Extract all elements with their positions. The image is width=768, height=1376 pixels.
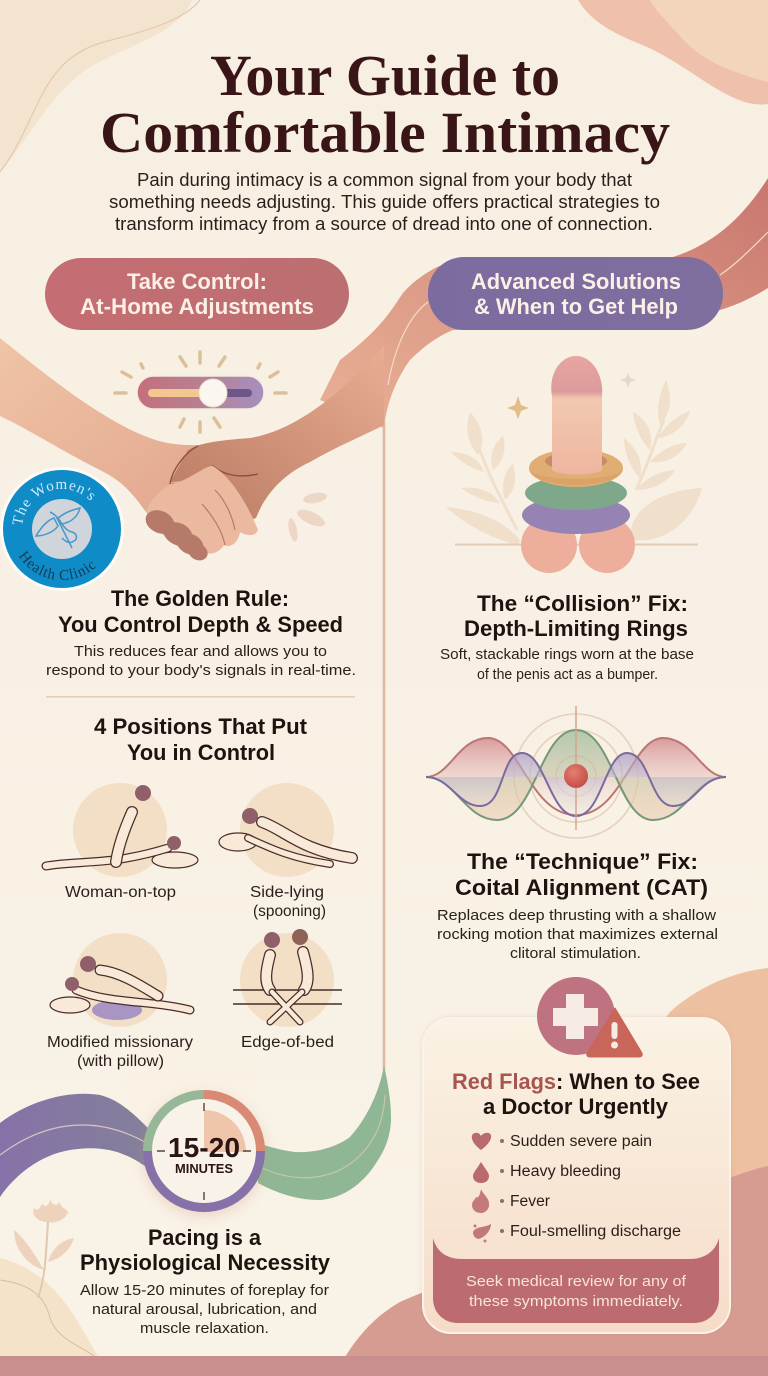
pacing text: muscle relaxation. [140, 1320, 269, 1337]
list: heavy bleeding [473, 1162, 621, 1183]
icon: control slider [115, 352, 286, 432]
position: edge-of-bed: Edge-of-bed [241, 1034, 334, 1051]
technique fix text: Replaces deep thrusting with a shallow [437, 907, 716, 924]
icon: sparkles [507, 373, 636, 419]
list: sudden severe pain: Sudden severe pain [510, 1133, 652, 1150]
icon: caduceus [36, 508, 80, 548]
position: edge-of-bed [233, 929, 342, 1051]
title [100, 43, 670, 165]
golden rule text: respond to your body's signals in real-time. [46, 662, 356, 679]
positions heading: You in Control [127, 740, 275, 765]
position: modified missionary: Modified missionary [47, 1034, 193, 1051]
seek review text: these symptoms immediately. [469, 1293, 683, 1310]
collision fix text: Depth-Limiting Rings [464, 616, 688, 641]
pacing text: Allow 15-20 minutes of foreplay for [80, 1282, 329, 1299]
technique fix text: The “Technique” Fix: [467, 849, 698, 874]
heading pill: take control: Take Control: [127, 269, 267, 294]
collision fix text: Soft, stackable rings worn at the base [440, 646, 694, 663]
pacing text: Pacing is a [148, 1225, 262, 1250]
title: Comfortable Intimacy [100, 100, 670, 165]
green ring [525, 476, 627, 510]
heading pill: take control [45, 258, 349, 330]
collision fix text: The “Collision” Fix: [477, 591, 688, 616]
list: fever: Fever [510, 1193, 550, 1210]
golden rule text [46, 586, 356, 679]
leaf sprigs [446, 380, 702, 545]
title: Your Guide to [210, 43, 560, 108]
red flags heading: Red Flags: When to See [452, 1069, 700, 1094]
list: heavy bleeding: Heavy bleeding [510, 1163, 621, 1180]
golden rule text: This reduces fear and allows you to [74, 643, 327, 660]
pacing text [80, 1225, 331, 1337]
red flags heading: a Doctor Urgently [483, 1094, 669, 1119]
handshake illustration [0, 338, 384, 563]
seek review text: Seek medical review for any of [466, 1273, 687, 1290]
pacing text: natural arousal, lubrication, and [92, 1301, 317, 1318]
pacing text: Physiological Necessity [80, 1250, 331, 1275]
clock: 15-20 minutes: MINUTES [175, 1161, 233, 1176]
logo: the women's health clinic: Health Clinic [18, 550, 96, 580]
clock: 15-20 minutes [143, 1090, 265, 1216]
list: foul-smelling discharge [473, 1223, 681, 1242]
logo: the women's health clinic: The Women's [12, 482, 94, 524]
technique fix text: Coital Alignment (CAT) [455, 875, 708, 900]
depth-limiting rings illustration [446, 356, 702, 573]
intro text [109, 170, 660, 234]
purple and green ribbon [0, 1065, 391, 1200]
golden rule text: The Golden Rule: [111, 586, 289, 611]
intro text: transform intimacy from a source of dread into one of connection. [115, 214, 653, 234]
icon: medical cross with warning [537, 977, 642, 1057]
collision fix text [440, 591, 694, 683]
positions heading: 4 Positions That Put [94, 714, 308, 739]
heading pill: advanced solutions: Advanced Solutions [471, 269, 681, 294]
position: modified missionary [47, 933, 193, 1070]
intro text: something needs adjusting. This guide offers practical strategies to [109, 192, 660, 212]
flowing ribbon and centre line [320, 178, 768, 1070]
position: woman-on-top: Woman-on-top [65, 884, 176, 901]
intro text: Pain during intimacy is a common signal from your body that [137, 170, 632, 190]
flower decoration [14, 1200, 74, 1298]
logo: the women's health clinic [0, 467, 124, 591]
position: side-lying: (spooning) [253, 903, 326, 920]
heading pill: take control: At-Home Adjustments [80, 294, 314, 319]
technique fix text [437, 849, 718, 962]
bottom band [0, 1356, 768, 1376]
positions heading [94, 714, 308, 765]
heading pill: advanced solutions: & When to Get Help [474, 294, 678, 319]
heading pill: advanced solutions [428, 257, 723, 330]
yellow ring [529, 449, 623, 487]
purple ring [522, 496, 630, 534]
position: side-lying: Side-lying [250, 884, 324, 901]
red flags heading [452, 1069, 700, 1119]
seek review text [466, 1273, 687, 1310]
position: side-lying [219, 783, 352, 920]
golden rule text: You Control Depth & Speed [58, 612, 343, 637]
collision fix text: of the penis act as a bumper. [477, 666, 658, 683]
rounded base [521, 517, 635, 573]
column [551, 356, 602, 474]
panel: red flags [423, 977, 730, 1333]
technique fix text: rocking motion that maximizes external [437, 926, 718, 943]
list: fever [472, 1189, 550, 1213]
wave diagram [426, 706, 726, 838]
list: foul-smelling discharge: Foul-smelling discharge [510, 1223, 681, 1240]
callout band [433, 1238, 719, 1323]
technique fix text: clitoral stimulation. [510, 945, 641, 962]
clock: 15-20 minutes: 15-20 [168, 1132, 240, 1163]
position: modified missionary: (with pillow) [77, 1053, 164, 1070]
position: woman-on-top [46, 783, 198, 901]
